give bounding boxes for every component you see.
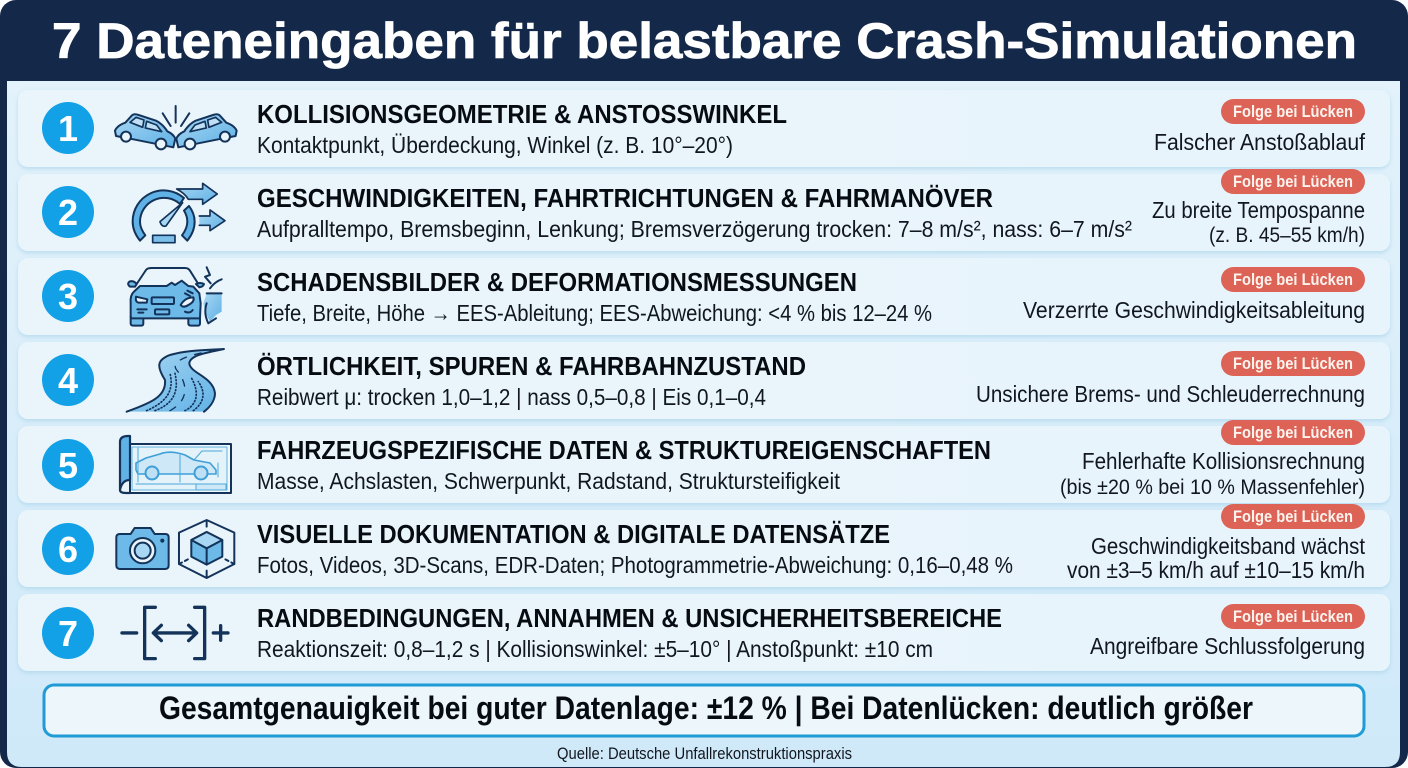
badge 7 — [1221, 604, 1365, 629]
heading 1: KOLLISIONSGEOMETRIE & ANSTOSSWINKEL — [257, 99, 787, 129]
callout: overall accuracy — [44, 685, 1364, 736]
panel: row 6 — [18, 504, 1390, 587]
consequence 3: Verzerrte Geschwindigkeitsableitung — [1023, 297, 1365, 323]
badge 7: Folge bei Lücken — [1233, 607, 1353, 626]
consequence 4: Unsichere Brems- und Schleuderrechnung — [976, 381, 1365, 407]
consequence 5: (bis ±20 % bei 10 % Massenfehler) — [1060, 476, 1365, 499]
panel: row 5 — [18, 420, 1390, 503]
consequence 7: Angreifbare Schlussfolgerung — [1090, 633, 1365, 659]
heading 5: FAHRZEUGSPEZIFISCHE DATEN & STRUKTUREIGENSCHAFTEN — [257, 435, 991, 465]
panel: row 7 — [18, 594, 1390, 671]
details 6: Fotos, Videos, 3D-Scans, EDR-Daten; Photogrammetrie-Abweichung: 0,16–0,48 % — [257, 552, 1013, 578]
heading 3: SCHADENSBILDER & DEFORMATIONSMESSUNGEN — [257, 267, 857, 297]
details 3: Tiefe, Breite, Höhe → EES-Ableitung; EES-Abweichung: <4 % bis 12–24 % — [257, 300, 932, 326]
panel: row 3 — [18, 258, 1390, 335]
badge 1 — [1221, 99, 1365, 124]
panel: row 1 — [18, 90, 1390, 167]
icon: road with skid marks — [127, 349, 224, 412]
heading 7: RANDBEDINGUNGEN, ANNAHMEN & UNSICHERHEITSBEREICHE — [257, 603, 1002, 633]
icon: speedometer with arrows — [133, 183, 225, 243]
consequence 2 — [1152, 197, 1365, 247]
icon: vehicle blueprint — [120, 436, 231, 493]
badge 5: Folge bei Lücken — [1233, 423, 1353, 442]
consequence 6: von ±3–5 km/h auf ±10–15 km/h — [1067, 557, 1365, 583]
details 5: Masse, Achslasten, Schwerpunkt, Radstand, Struktursteifigkeit — [257, 468, 841, 494]
consequence 1: Falscher Anstoßablauf — [1154, 129, 1366, 155]
panel: row 5: 5 — [58, 445, 78, 486]
badge 2: Folge bei Lücken — [1233, 172, 1353, 191]
heading 2: GESCHWINDIGKEITEN, FAHRTRICHTUNGEN & FAHRMANÖVER — [257, 183, 993, 213]
badge 1: Folge bei Lücken — [1233, 102, 1353, 121]
badge 6: Folge bei Lücken — [1233, 507, 1353, 526]
icon: tolerance range brackets — [122, 607, 228, 659]
badge 4: Folge bei Lücken — [1233, 354, 1353, 373]
badge 5 — [1221, 420, 1365, 445]
panel: row 2: 2 — [58, 192, 78, 233]
title: 7 Dateneingaben für belastbare Crash-Simulationen — [52, 13, 1357, 69]
panel: row 4: 4 — [58, 360, 78, 401]
panel: row 6: 6 — [58, 529, 78, 570]
panel: row 3: 3 — [58, 276, 78, 317]
consequence 5 — [1060, 448, 1365, 499]
badge 2 — [1221, 169, 1365, 194]
details 7: Reaktionszeit: 0,8–1,2 s | Kollisionswinkel: ±5–10° | Anstoßpunkt: ±10 cm — [257, 636, 933, 662]
panel: row 4 — [18, 342, 1390, 419]
panel: row 7: 7 — [58, 613, 78, 654]
panel: row 2 — [18, 169, 1390, 251]
panel: row 1: 1 — [58, 108, 78, 149]
icon: colliding cars — [115, 106, 237, 149]
source: Quelle: Deutsche Unfallrekonstruktionspraxis — [557, 744, 852, 763]
icon: damaged car — [128, 267, 222, 326]
consequence 2: Zu breite Tempospanne — [1152, 197, 1365, 223]
consequence 6: Geschwindigkeitsband wächst — [1091, 533, 1366, 559]
badge 3 — [1221, 267, 1365, 292]
icon: camera and 3D cube — [116, 520, 234, 578]
callout: overall accuracy: Gesamtgenauigkeit bei guter Datenlage: ±12 % | Bei Datenlücken: deutlich größer — [159, 690, 1253, 726]
consequence 2: (z. B. 45–55 km/h) — [1209, 224, 1365, 247]
badge 4 — [1221, 351, 1365, 376]
badge 3: Folge bei Lücken — [1233, 270, 1353, 289]
consequence 5: Fehlerhafte Kollisionsrechnung — [1082, 448, 1365, 474]
heading 4: ÖRTLICHKEIT, SPUREN & FAHRBAHNZUSTAND — [257, 351, 806, 381]
details 4: Reibwert μ: trocken 1,0–1,2 | nass 0,5–0,8 | Eis 0,1–0,4 — [257, 384, 766, 410]
consequence 6 — [1067, 533, 1366, 583]
details 1: Kontaktpunkt, Überdeckung, Winkel (z. B. 10°–20°) — [257, 132, 733, 158]
details 2: Aufpralltempo, Bremsbeginn, Lenkung; Bremsverzögerung trocken: 7–8 m/s², nass: 6–7 m/s² — [257, 216, 1132, 242]
heading 6: VISUELLE DOKUMENTATION & DIGITALE DATENSÄTZE — [257, 519, 890, 549]
badge 6 — [1221, 504, 1365, 529]
